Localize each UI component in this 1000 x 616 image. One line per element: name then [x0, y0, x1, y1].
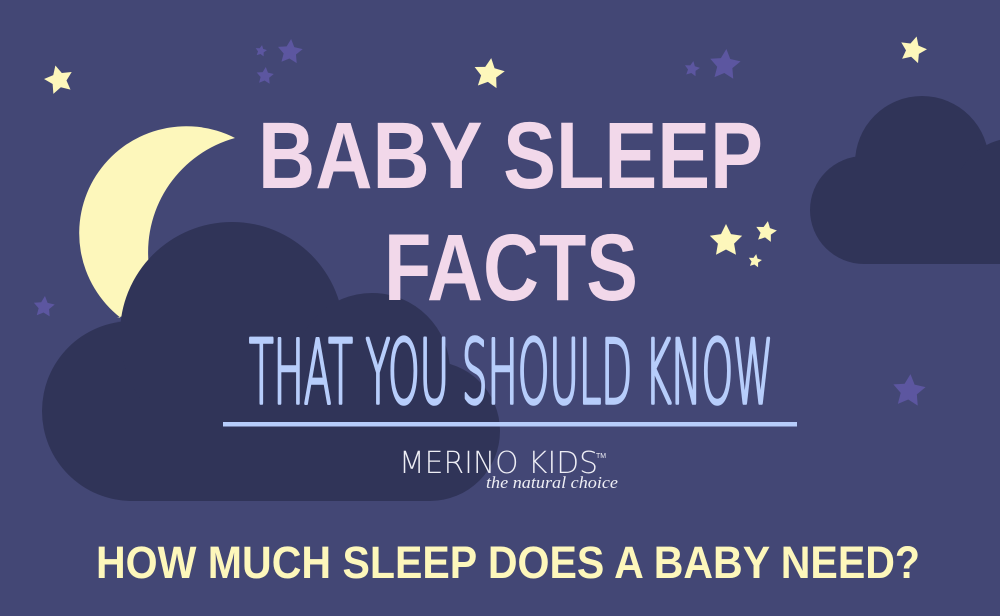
star: [892, 373, 927, 406]
star: [277, 38, 303, 64]
divider line: [223, 422, 797, 426]
purple stars: [33, 38, 927, 406]
icon: crescent moon: [79, 126, 235, 318]
star: [710, 224, 742, 255]
star: [747, 253, 763, 268]
title line 1: BABY SLEEP: [258, 103, 763, 209]
title line 2: FACTS: [384, 215, 638, 321]
star: [472, 56, 506, 89]
star: [256, 66, 274, 84]
title: [258, 103, 763, 321]
star: [683, 60, 701, 77]
star: [897, 33, 929, 64]
star: [42, 62, 76, 95]
trademark: TM: [596, 453, 606, 460]
brand name: MERINO KIDS: [399, 446, 598, 481]
yellow stars: [42, 33, 929, 268]
section heading: HOW MUCH SLEEP DOES A BABY NEED?: [96, 537, 920, 588]
star: [33, 295, 55, 317]
logo: Merino Kids: [399, 446, 618, 492]
star: [709, 48, 742, 79]
icon: large cloud: [42, 222, 500, 501]
star: [754, 219, 778, 243]
icon: right cloud: [810, 96, 1000, 264]
star: [255, 44, 268, 57]
tagline: the natural choice: [486, 473, 618, 492]
